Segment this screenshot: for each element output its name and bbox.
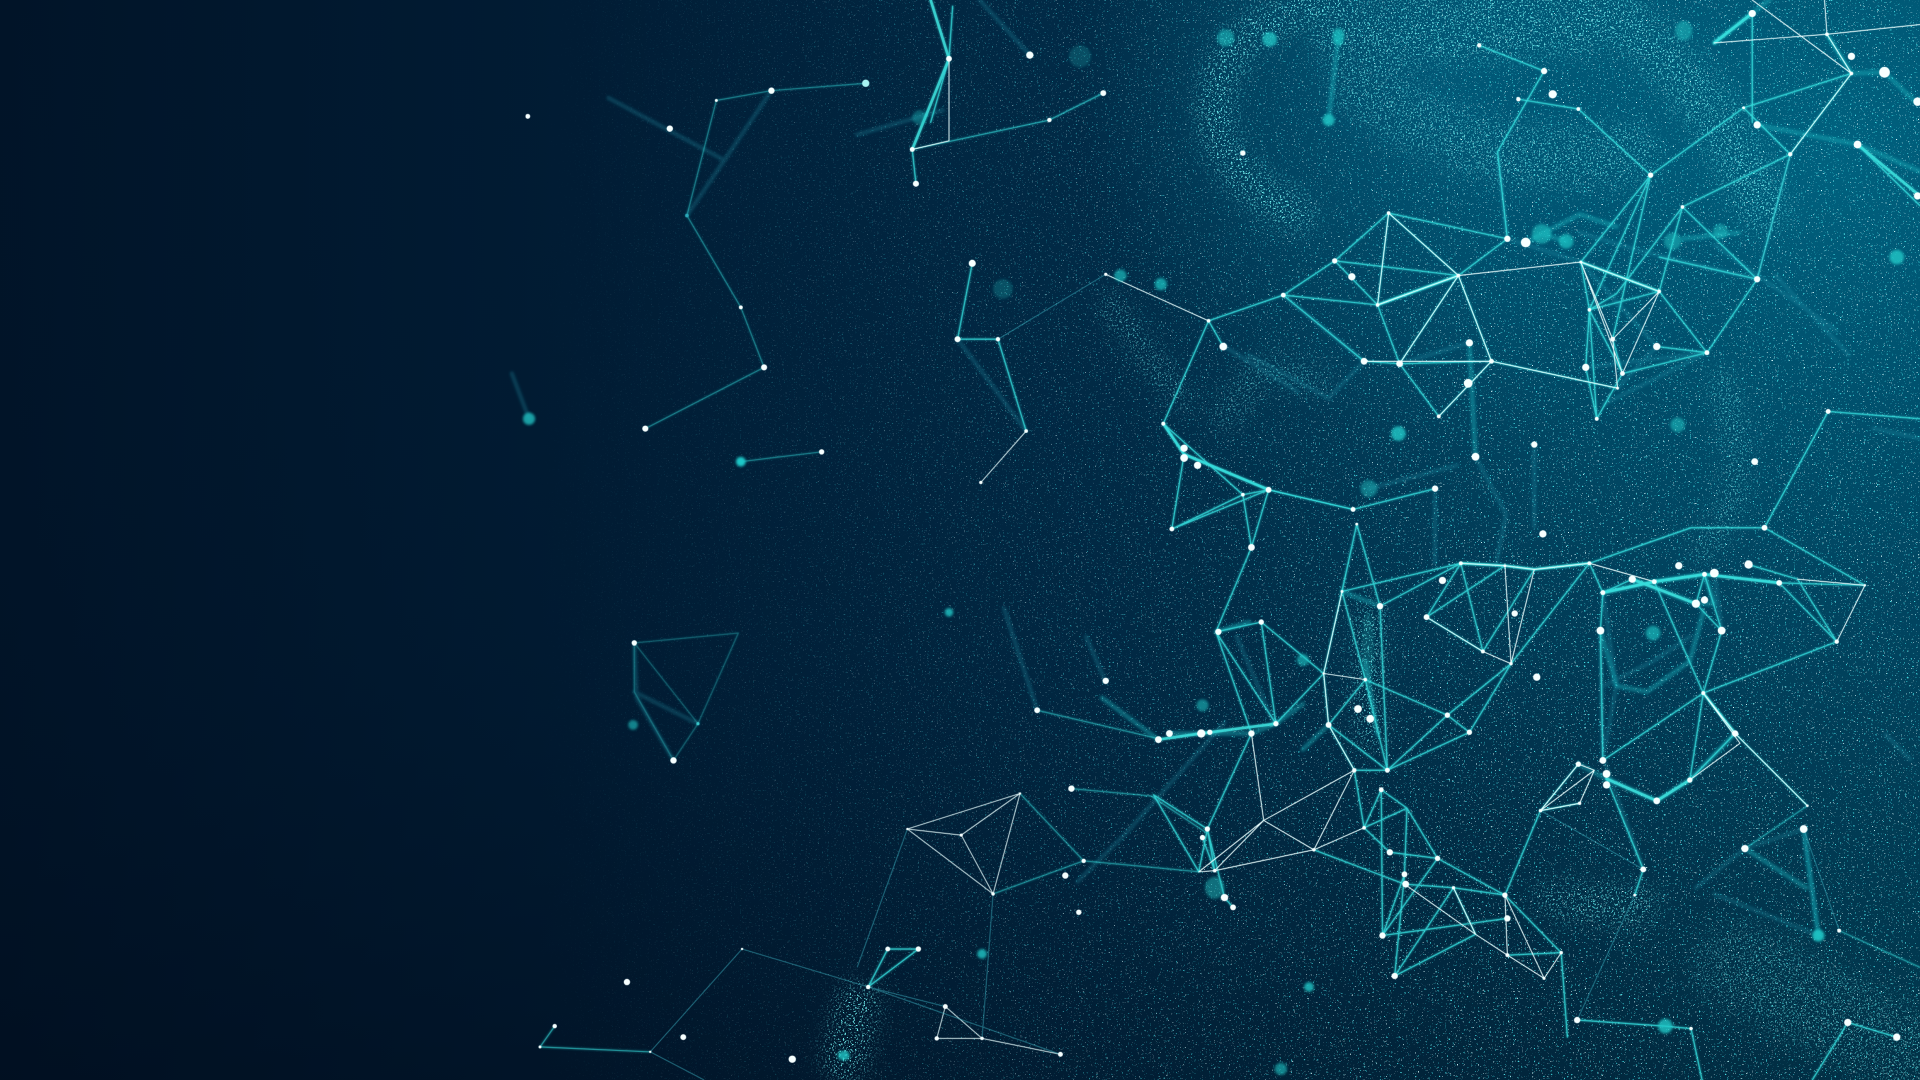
node links: white highlights <box>650 0 1920 1080</box>
node links: teal <box>540 6 1920 1080</box>
particle dust field <box>578 0 1920 1080</box>
bright white nodes <box>525 10 1920 1063</box>
bright thick strands <box>912 0 1920 801</box>
out-of-focus network strands <box>512 0 1920 936</box>
blurred teal bokeh nodes <box>523 21 1904 1075</box>
